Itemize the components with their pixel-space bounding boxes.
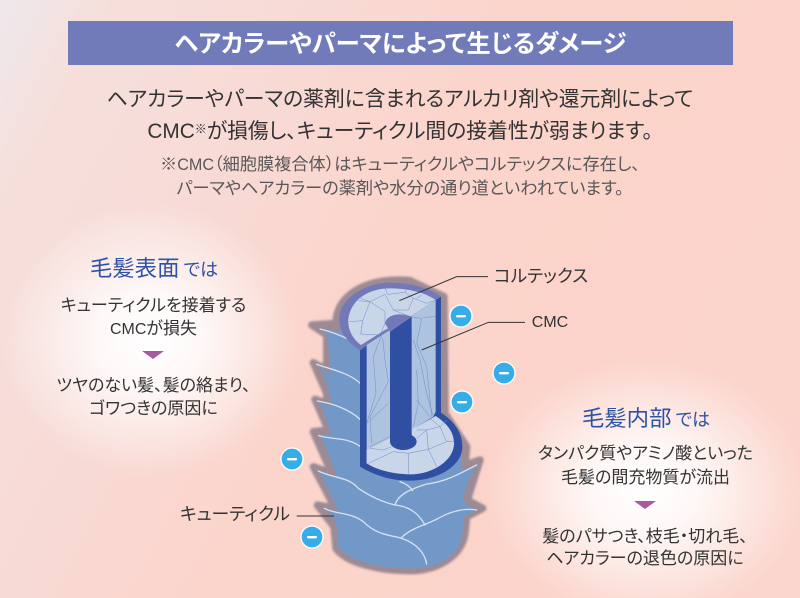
arrow: down [634,501,656,509]
cortex top face [348,288,436,345]
arrow: down [142,351,164,359]
leader line: cuticle [297,514,334,517]
effect text: ヘアカラーの退色の原因に [546,549,744,568]
footnote: CMC definition: ※CMC（細胞膜複合体）はキューティクルやコルテックスに存在し、 [160,154,640,174]
panel: hair interior [538,406,753,568]
cause text: 毛髪の間充物質が流出 [561,468,730,487]
panel: hair surface [56,256,251,418]
outer rim [339,283,441,350]
hair shadow [312,280,483,571]
intro text: ヘアカラーやパーマの薬剤に含まれるアルカリ剤や還元剤によって [107,88,693,111]
cause text: CMCが損失 [110,318,197,338]
effect text: ツヤのない髪、髪の絡まり、 [56,376,251,394]
cell lines [349,288,454,474]
label: CMC: CMC [532,314,568,331]
effect text: ゴワつきの原因に [89,398,218,418]
cause text: タンパク質やアミノ酸といった [538,444,753,462]
footnote: CMC definition [160,154,640,198]
intro text: CMC※が損傷し、キューティクル間の接着性が弱まります。 [147,120,653,142]
heading: hair surface: 毛髪表面では [90,256,218,281]
medulla core [385,314,417,450]
leader line: CMC [422,322,525,350]
leader line: cortex [399,277,488,301]
cutaway shell [360,297,462,481]
title banner: ヘアカラーやパーマによって生じるダメージ [175,31,626,58]
minus ion badges [281,305,515,548]
effect text [542,526,748,568]
footnote: CMC definition: パーマやヘアカラーの薬剤や水分の通り道といわれています。 [176,178,624,198]
effect text [56,376,251,418]
cortex bottom face [367,416,454,474]
heading: hair interior: 毛髪内部では [582,406,710,431]
intro text [107,88,693,142]
cortex inner wall [367,300,436,463]
cause text: キューティクルを接着する [61,296,246,314]
cuticle [317,329,477,568]
title banner [68,21,733,65]
cause text [538,444,753,487]
cause text [61,296,246,338]
label: cuticle: キューティクル [180,504,290,524]
label: cortex: コルテックス [494,266,588,286]
effect text: 髪のパサつき、枝毛・切れ毛、 [542,526,748,546]
